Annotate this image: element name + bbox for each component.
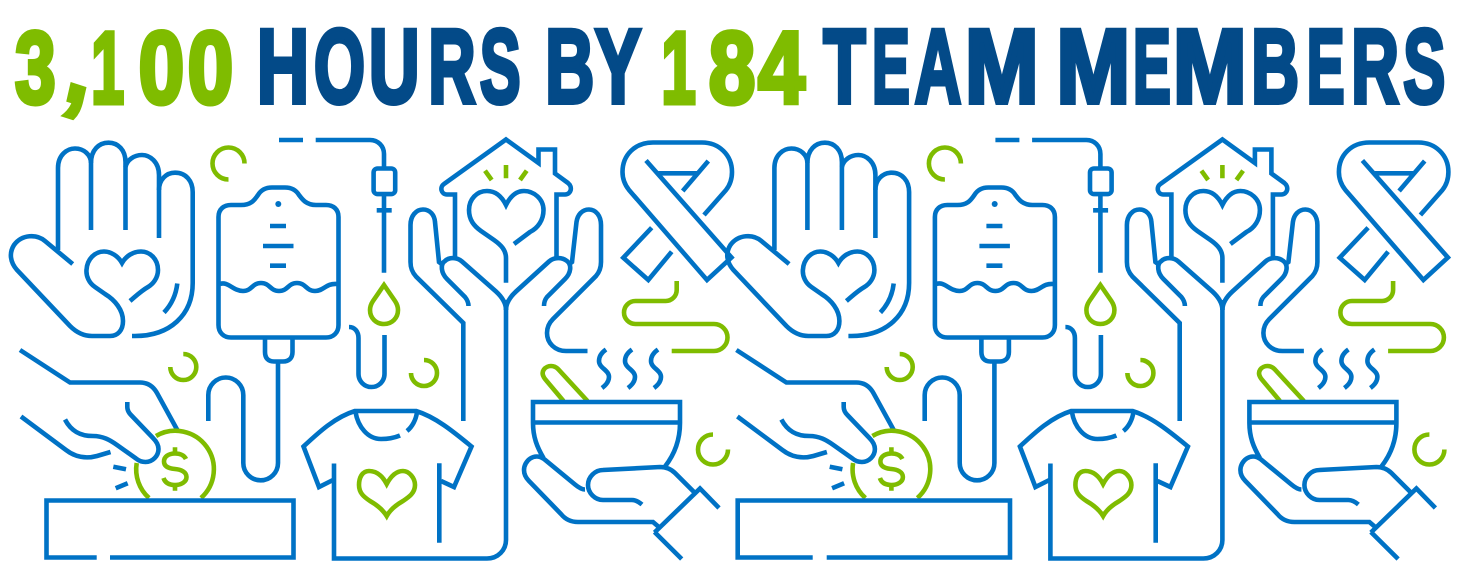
icon: t-shirt (304, 300, 506, 558)
illustration group: right set (727, 140, 1448, 559)
icon: hands holding house (1127, 140, 1317, 421)
icon: IV drip line (995, 140, 1112, 387)
icon: donating hand (20, 350, 177, 488)
title: 8 (709, 10, 755, 125)
title: 0 (139, 10, 184, 125)
icon: open hand with heart (11, 143, 193, 336)
icon: small green arc (411, 360, 437, 386)
title: U (369, 8, 420, 126)
icon: small green arc (170, 354, 196, 380)
illustration group: left set (11, 140, 732, 559)
icon: dollar coin (853, 431, 930, 498)
donation box (738, 500, 1010, 558)
icon: green squiggle line (1340, 281, 1444, 351)
title: 0 (188, 10, 233, 125)
icon: small green arc (212, 148, 244, 180)
title: R (1351, 8, 1399, 126)
title: E (1133, 8, 1171, 126)
icon: donating hand (736, 350, 894, 488)
icon: IV bag (208, 188, 338, 480)
icon: green squiggle line (624, 281, 728, 351)
icon: small green arc (929, 148, 961, 180)
icon: t-shirt (1020, 300, 1222, 558)
icon: green spoon (1259, 366, 1304, 401)
title: Y (595, 8, 641, 126)
title: , (57, 8, 110, 125)
icon: awareness ribbon (1339, 142, 1448, 280)
icon: dollar coin (136, 431, 214, 498)
icon: open hand with heart (727, 143, 909, 336)
icon: small green arc (698, 434, 728, 465)
title: 4 (758, 10, 805, 125)
icon: green rays above heart (1201, 165, 1243, 180)
title: 1 (661, 10, 696, 125)
title: H (257, 8, 309, 126)
title: S (480, 8, 521, 126)
title: R (428, 8, 476, 126)
icon: green drop (370, 285, 398, 324)
icon: steam (1315, 350, 1377, 388)
title: 3 (15, 10, 56, 125)
title: M (1173, 8, 1247, 126)
icon: green spoon (543, 366, 588, 401)
icon: small green arc (887, 354, 913, 380)
icon: IV bag (925, 188, 1055, 480)
icon: hand holding bowl (1240, 402, 1435, 559)
icon: IV drip line (279, 140, 395, 387)
icon: hand holding bowl (524, 402, 719, 559)
icon: awareness ribbon (622, 142, 732, 280)
donation box (46, 500, 294, 558)
icon: green drop (1086, 285, 1114, 324)
icon: green heart on shirt (1075, 471, 1131, 516)
title: M (1056, 8, 1130, 126)
title: 1 (91, 10, 124, 125)
title: B (545, 8, 594, 126)
icon: small green arc (1127, 360, 1153, 386)
title: O (314, 8, 365, 126)
title: E (872, 8, 910, 126)
icon: green heart on shirt (359, 471, 415, 516)
title: B (1251, 8, 1299, 126)
icon: steam (599, 350, 661, 388)
title (15, 8, 1445, 125)
title: M (965, 8, 1039, 126)
icon: green rays above heart (485, 165, 527, 180)
title: A (915, 8, 961, 126)
icon: hands holding house (410, 140, 601, 421)
icon: small green arc (1414, 434, 1444, 465)
title: E (1307, 8, 1344, 126)
title: T (823, 8, 866, 126)
